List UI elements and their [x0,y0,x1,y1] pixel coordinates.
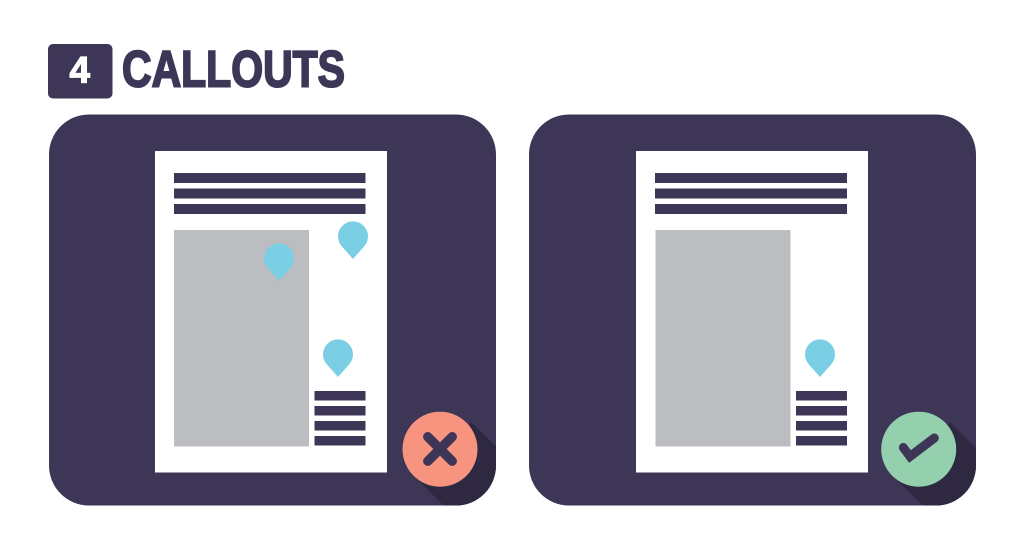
image placeholder [174,230,309,446]
icon: cross badge [402,412,478,487]
long shadow of check badge [896,422,976,506]
long shadow of cross badge [416,422,496,506]
title badge: number 4 [48,44,112,98]
icon: check badge [881,412,956,487]
heading: callouts: CALLOUTS [122,40,345,98]
callout pin top right [338,221,368,259]
document heading lines [174,173,366,214]
callout pin beside caption [805,339,835,377]
panel: incorrect callout placement [49,114,496,506]
callout pin lower right [323,339,353,377]
document heading lines [655,173,847,214]
image placeholder [656,230,790,446]
document page [636,151,868,472]
panel background [529,114,976,506]
caption lines [796,391,847,446]
caption lines [314,391,366,446]
callout pin on image [264,243,294,281]
panel background [49,114,496,506]
title badge: number 4: 4 [70,50,90,90]
panel: correct callout placement [529,114,976,506]
document page [155,151,387,472]
